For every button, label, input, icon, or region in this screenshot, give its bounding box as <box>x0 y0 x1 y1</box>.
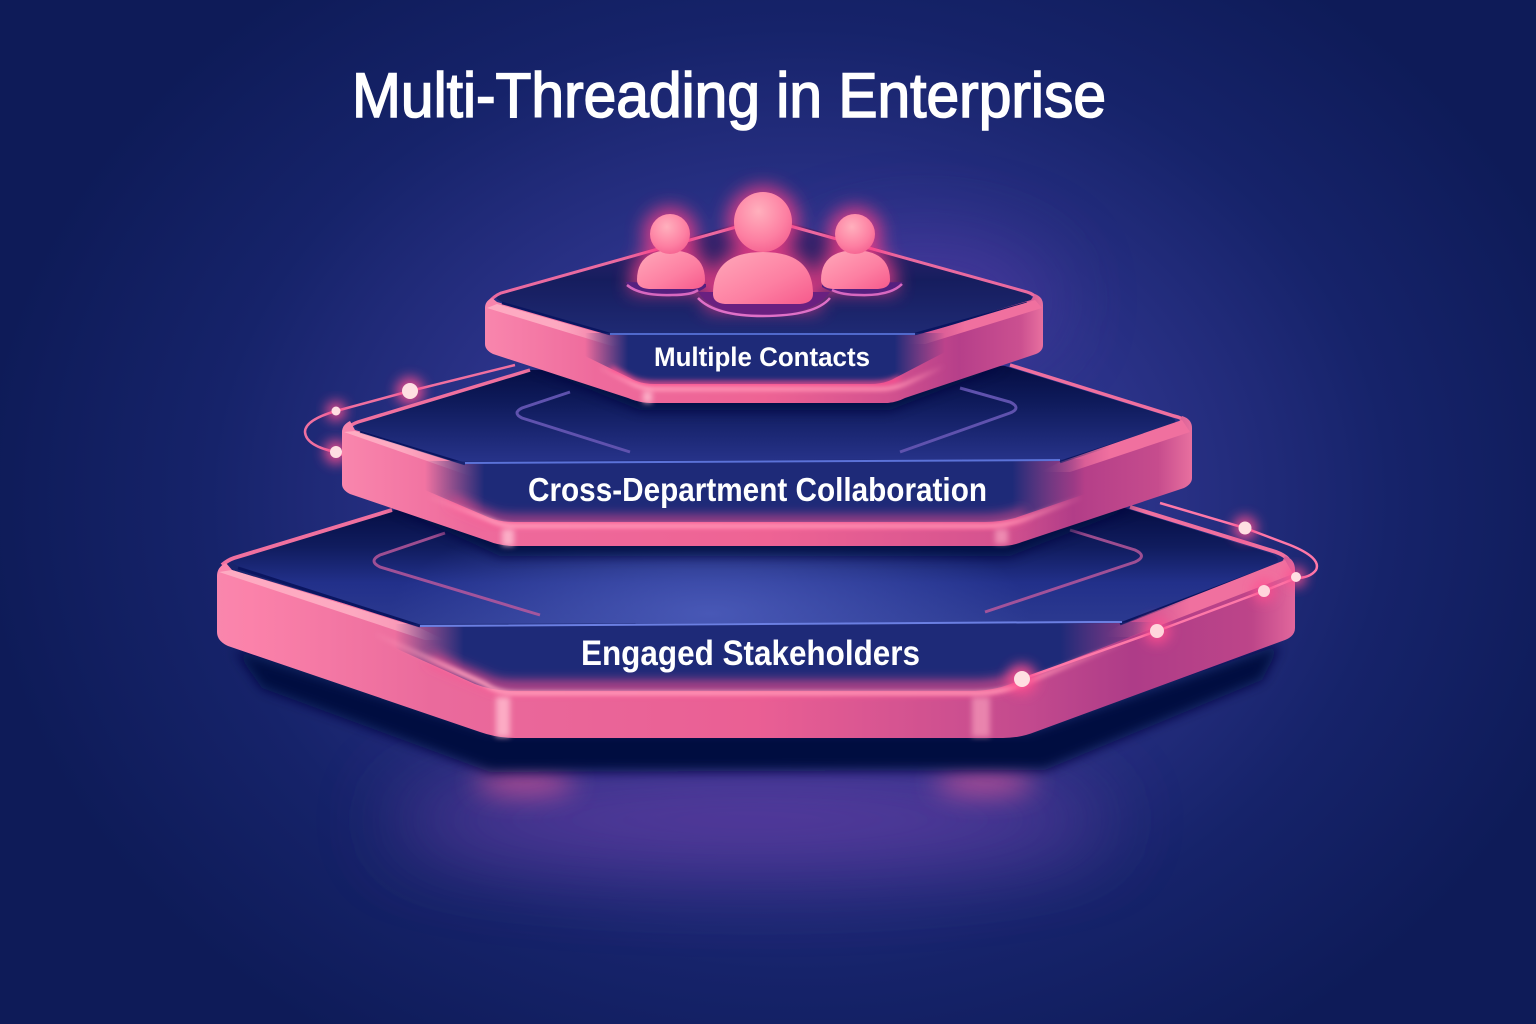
tier 1 front glow <box>610 368 900 384</box>
contact base rings <box>626 282 903 316</box>
tier 1 label band <box>585 333 945 384</box>
tier 2 corner sheen right <box>995 529 1008 544</box>
tier 2 label band <box>425 459 1085 522</box>
tier 3 label band <box>395 622 1160 691</box>
tier 3 top surface <box>232 508 1278 626</box>
tier 2 corner sheen <box>502 529 514 546</box>
tier 3 corner sheen right <box>972 697 990 737</box>
glow behind people <box>630 186 897 310</box>
tier 3 corner sheen <box>496 697 510 737</box>
floor shadow and glow <box>235 240 1280 865</box>
tier 3 inner outline <box>374 530 1142 615</box>
tier 1 back rim <box>489 226 1039 302</box>
tier 2 front glow <box>450 500 1025 521</box>
icon: three contacts <box>626 186 903 316</box>
tier 2 inner outline <box>517 388 1016 452</box>
tier 1 shadow on tier below <box>530 365 1005 410</box>
tier 3 left rim highlight <box>219 570 445 640</box>
tier 2 shadow on tier below <box>390 505 1140 556</box>
right connector line with nodes <box>1007 503 1317 694</box>
person left <box>637 214 705 289</box>
tier 1 side walls <box>485 294 1043 403</box>
tier 2 top surface <box>355 366 1176 464</box>
tier 2 front line <box>465 460 1060 463</box>
tier 1: Multiple Contacts platform <box>485 215 1043 410</box>
tier 2 right rim <box>1040 420 1190 472</box>
tier 1 corner sheen <box>643 391 652 403</box>
tier 3 right rim <box>1100 560 1293 637</box>
tier 1 front strip top <box>600 366 945 389</box>
title: Multi-Threading in Enterprise <box>352 61 1106 131</box>
tier 3: Engaged Stakeholders platform <box>217 507 1295 738</box>
tier 2 inner dark edges <box>360 426 1170 464</box>
tier 1 right rim <box>900 300 1042 344</box>
tier 3 back rim <box>222 507 1288 565</box>
tier 2 back rim <box>346 365 1188 429</box>
tier 2 side walls <box>342 416 1192 546</box>
tier 3 front strip top <box>375 634 1130 693</box>
tier 1 top surface <box>496 215 1032 334</box>
label: Cross-Department Collaboration: Cross-Department Collaboration <box>528 471 987 508</box>
label: Engaged Stakeholders: Engaged Stakeholders <box>581 634 920 673</box>
tier 1 inner dark edges <box>502 303 1027 334</box>
tier 2: Cross-Department Collaboration platform <box>342 365 1192 556</box>
tier 3 surface light <box>232 508 1278 626</box>
tier 2 left rim highlight <box>344 431 485 476</box>
left connector line with nodes <box>305 365 515 464</box>
person right <box>821 214 890 289</box>
tier 3 front line <box>420 622 1122 626</box>
tier 1 front line <box>610 333 915 335</box>
tier 2 front strip top <box>430 497 1080 526</box>
person center <box>713 192 813 304</box>
tier 3 side walls <box>217 556 1295 738</box>
label: Multiple Contacts: Multiple Contacts <box>654 342 870 372</box>
tier 1 left rim highlight <box>487 304 628 346</box>
tier 3 inner dark edges <box>238 566 1274 626</box>
tier 3 front glow <box>430 658 1022 687</box>
